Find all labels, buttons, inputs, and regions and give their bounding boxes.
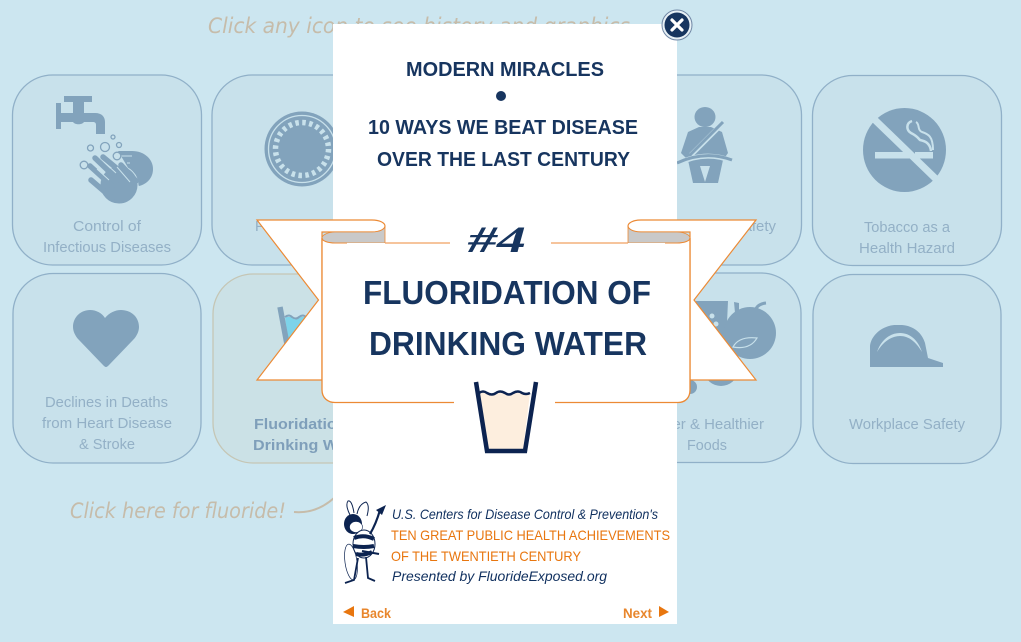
icon: seat belt: [677, 107, 732, 183]
label: Fluoridation of: [254, 417, 366, 433]
card: family planning: [212, 75, 402, 265]
ribbon left fold: [322, 226, 385, 243]
ribbon banner: [257, 220, 756, 402]
label: Health Hazard: [859, 241, 955, 257]
card: control of infectious diseases: [12, 75, 202, 265]
ribbon right fold: [628, 226, 690, 243]
back button: [343, 606, 391, 621]
callout: click here for fluoride: Click here for fluoride!: [70, 499, 286, 523]
icon: heart: [73, 310, 139, 367]
credit text: Presented by FluorideExposed.org: [392, 568, 607, 584]
card: safer and healthier foods: [612, 273, 801, 462]
label: Declines in Deaths: [45, 395, 168, 411]
credit text: [391, 506, 670, 584]
label: Safer & Healthier: [650, 417, 764, 433]
card: fluoridation, highlighted: [213, 274, 402, 463]
ribbon title: DRINKING WATER: [369, 325, 647, 362]
ribbon right tail: [628, 220, 756, 380]
top instruction: Click any icon to see history and graphics: [208, 14, 630, 38]
label: [253, 417, 367, 454]
ribbon title: FLUORIDATION OF: [363, 274, 651, 311]
ribbon number: #4: [466, 220, 526, 261]
label: Motor-Vehicle Safety: [638, 219, 777, 235]
label: [859, 220, 955, 257]
icon: faucet: [56, 96, 105, 134]
next button: [623, 606, 669, 621]
label: [42, 395, 172, 453]
heading: modern miracles: MODERN MIRACLES: [406, 59, 604, 81]
card: motor-vehicle safety: [612, 75, 802, 265]
label: Foods: [687, 438, 727, 454]
card: workplace safety: [813, 274, 1001, 464]
label: Tobacco as a: [864, 220, 951, 236]
label: Family Planning: [255, 219, 359, 235]
ribbon left tail: [257, 220, 385, 380]
icon: no smoking: [863, 108, 946, 192]
label: Drinking Water: [253, 438, 367, 454]
arrow: [294, 498, 334, 512]
credit text: OF THE TWENTIETH CENTURY: [391, 548, 582, 564]
label: from Heart Disease: [42, 416, 172, 432]
next button: Next: [623, 606, 652, 621]
heading: modern miracles: [368, 59, 638, 171]
back button: Back: [361, 606, 391, 621]
icon: glass of water: [280, 307, 335, 367]
icon: close button: [662, 10, 692, 40]
icon: pill dispenser: [264, 112, 340, 186]
heading: modern miracles: 10 WAYS WE BEAT DISEASE: [368, 117, 638, 139]
icon: glass of water: [476, 382, 536, 451]
label: Infectious Diseases: [43, 240, 171, 256]
icon: washing hands: [80, 135, 153, 204]
ribbon main body: [322, 238, 690, 402]
card: heart disease: [13, 274, 201, 463]
label: & Stroke: [79, 437, 135, 453]
icon: bee mascot: [343, 501, 386, 583]
heading: modern miracles: OVER THE LAST CENTURY: [377, 149, 631, 171]
icon: foods: [683, 301, 776, 394]
label: [650, 417, 764, 454]
label: [43, 219, 171, 256]
panel: modal card: [333, 24, 677, 624]
credit text: TEN GREAT PUBLIC HEALTH ACHIEVEMENTS: [391, 527, 670, 543]
credit text: U.S. Centers for Disease Control & Prevention's: [392, 506, 658, 522]
label: Control of: [73, 219, 142, 235]
icon: hard hat: [870, 325, 943, 367]
card: tobacco: [812, 76, 1002, 266]
ribbon title: [363, 274, 651, 362]
label: Workplace Safety: [849, 417, 966, 433]
